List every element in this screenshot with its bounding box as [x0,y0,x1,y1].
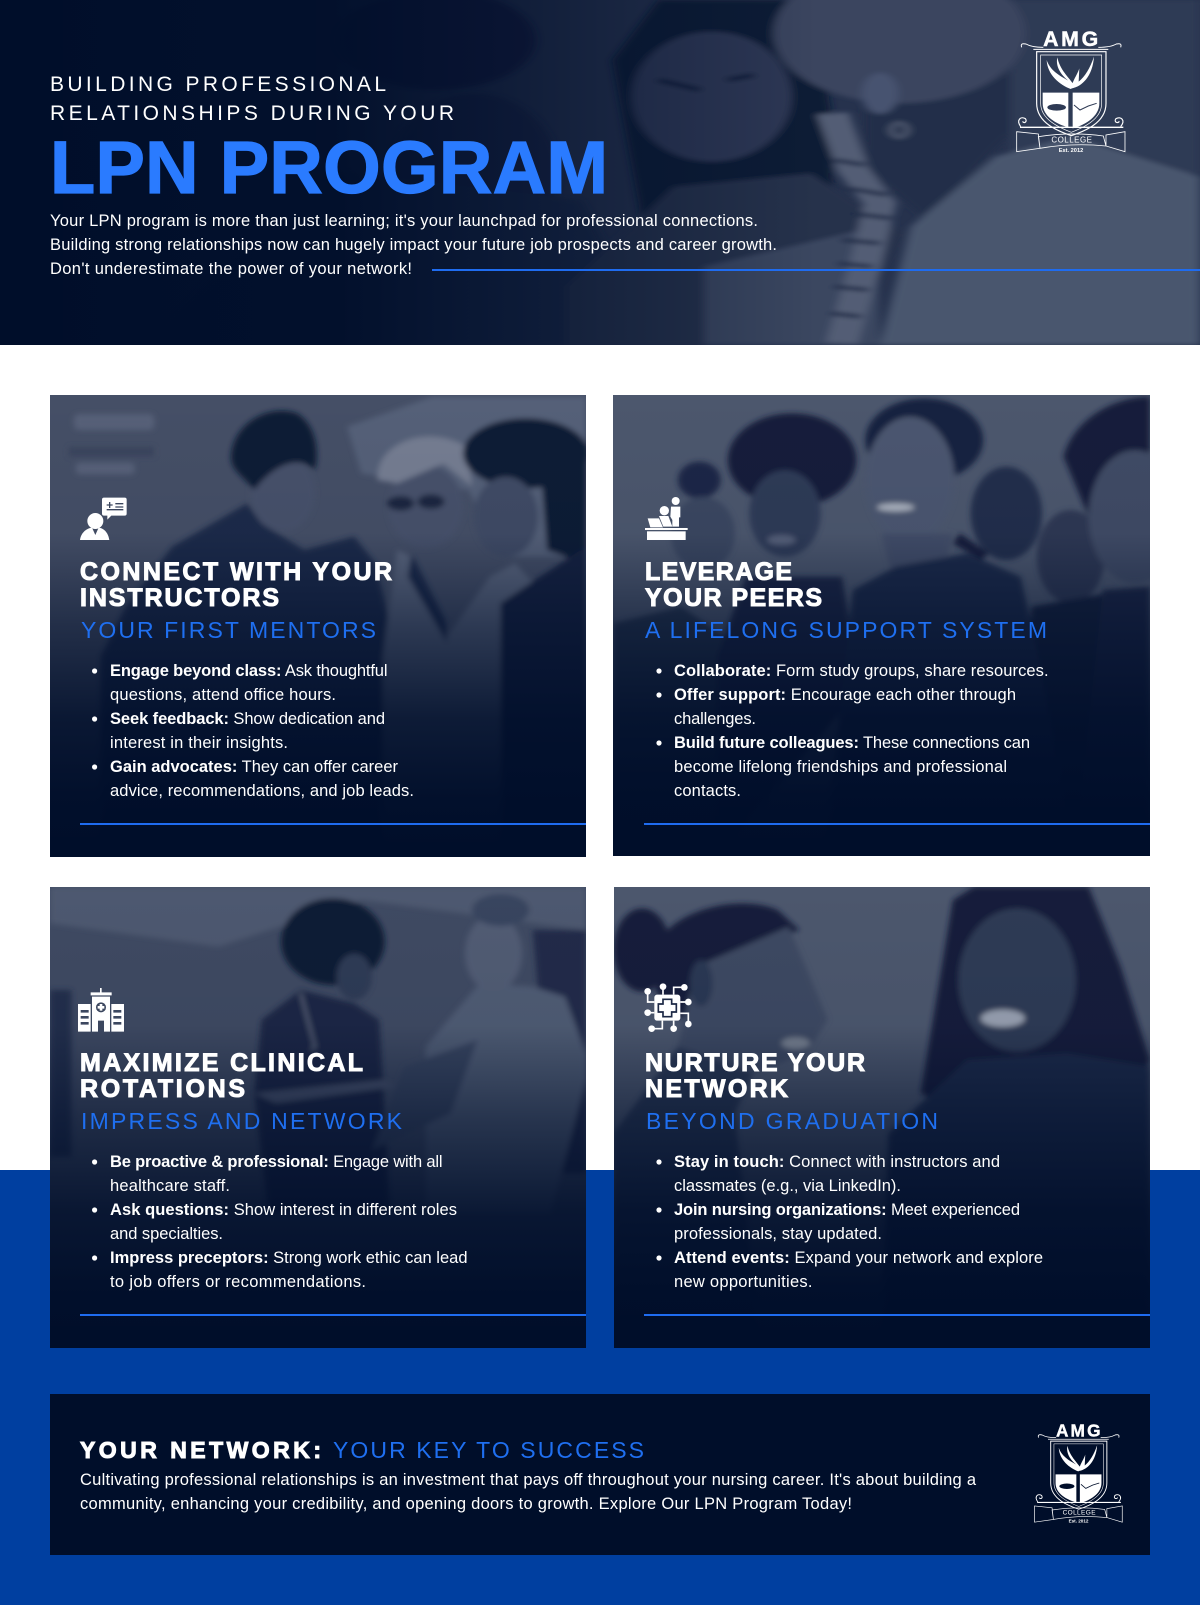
bullet list: Build future colleagues: These connections can [674,734,1030,752]
footer heading: YOUR NETWORK: [80,1437,321,1463]
heading: INSTRUCTORS [80,584,279,612]
bullet list: challenges. [674,710,756,728]
heading [80,558,392,612]
panel: maximize clinical rotations [50,887,586,1348]
logo: AMG College: AMG [1043,27,1098,51]
panel: footer callout [50,1394,1150,1555]
bullet list: become lifelong friendships and professional [674,758,1007,776]
logo: AMG College footer: AMG [1056,1421,1101,1441]
bullet list: classmates (e.g., via LinkedIn). [674,1177,901,1195]
bullet list [656,662,1049,800]
heading: kicker: RELATIONSHIPS DURING YOUR [50,102,454,125]
bullet list: Ask questions: Show interest in different roles [110,1201,457,1219]
bullet list: Gain advocates: They can offer career [110,758,398,776]
photo: clinical [50,887,586,1348]
subheading: A LIFELONG SUPPORT SYSTEM [645,617,1047,643]
header photo background [0,0,1200,345]
bullet list: Engage beyond class: Ask thoughtful [110,662,388,680]
heading [645,1049,865,1103]
photo: network [614,887,1150,1348]
heading: CONNECT WITH YOUR [80,558,392,586]
panel: connect with your instructors [50,395,588,857]
bullet list: Collaborate: Form study groups, share resources. [674,662,1049,680]
blue lower background band [0,1170,1200,1605]
bullet list [92,1153,468,1291]
panel: nurture your network [614,887,1150,1348]
logo: AMG College footer: COLLEGE [1063,1510,1096,1517]
logo: AMG College: COLLEGE [1051,135,1092,144]
bullet list: Stay in touch: Connect with instructors and [674,1153,1000,1171]
bullet list: Attend events: Expand your network and explore [674,1249,1043,1267]
accent line [80,1314,586,1316]
accent line [644,1314,1150,1316]
accent line [644,823,1150,825]
bullet list: Impress preceptors: Strong work ethic can lead [110,1249,468,1267]
icon: doctor speech bubble [80,498,127,540]
heading [80,1049,363,1103]
logo: AMG College: Est. 2012 [1059,148,1083,154]
text block: intro: Don't underestimate the power of your network! [50,260,412,278]
footer background [50,1394,1150,1555]
heading [645,558,822,612]
bullet list: new opportunities. [674,1273,812,1291]
heading: kicker [50,73,454,125]
logo: AMG College footer: Est. 2012 [1069,1518,1089,1523]
subheading: IMPRESS AND NETWORK [81,1108,403,1134]
heading: ROTATIONS [80,1075,245,1103]
bullet list: questions, attend office hours. [110,686,336,704]
heading: LEVERAGE [645,558,792,586]
bullet list: professionals, stay updated. [674,1225,882,1243]
bullet list: Offer support: Encourage each other through [674,686,1016,704]
heading: kicker: BUILDING PROFESSIONAL [50,73,386,96]
bullet list: healthcare staff. [110,1177,230,1195]
bullet list: contacts. [674,782,741,800]
footer text [80,1471,977,1513]
footer heading [80,1437,644,1463]
heading: NETWORK [645,1075,788,1103]
icon: desk and people [645,497,688,540]
footer text: Cultivating professional relationships is an investment that pays off throughout your nursing career. It's about building a [80,1471,977,1489]
bullet list: Seek feedback: Show dedication and [110,710,385,728]
logo: AMG College footer [1034,1421,1122,1523]
title: LPN PROGRAM: LPN PROGRAM [50,126,608,209]
bullet list: and specialties. [110,1225,223,1243]
bullet list: interest in their insights. [110,734,288,752]
subheading: YOUR FIRST MENTORS [81,617,376,643]
icon: hospital [78,988,124,1032]
text block: intro: Building strong relationships now can hugely impact your future job prospects and career growth. [50,236,777,254]
text block: intro: Your LPN program is more than just learning; it's your launchpad for professional connections. [50,212,758,230]
heading: YOUR PEERS [645,584,822,612]
bullet list: Be proactive & professional: Engage with all [110,1153,442,1171]
bullet list: to job offers or recommendations. [110,1273,366,1291]
photo: instructors [50,395,588,857]
icon: medical network chip [644,983,692,1032]
accent line [432,269,1200,271]
photo: peers [613,395,1181,857]
logo: AMG College [1017,27,1125,154]
heading: NURTURE YOUR [645,1049,865,1077]
footer text: community, enhancing your credibility, and opening doors to growth. Explore Our LPN Program Today! [80,1495,852,1513]
accent line [80,823,586,825]
panel: leverage your peers [613,395,1181,857]
panel: header banner [0,0,1200,345]
bullet list [92,662,414,800]
heading: MAXIMIZE CLINICAL [80,1049,363,1077]
footer heading: YOUR KEY TO SUCCESS [333,1437,644,1463]
text block: intro [50,212,777,278]
bullet list [656,1153,1043,1291]
bullet list: advice, recommendations, and job leads. [110,782,414,800]
bullet list: Join nursing organizations: Meet experienced [674,1201,1020,1219]
subheading: BEYOND GRADUATION [646,1108,938,1134]
